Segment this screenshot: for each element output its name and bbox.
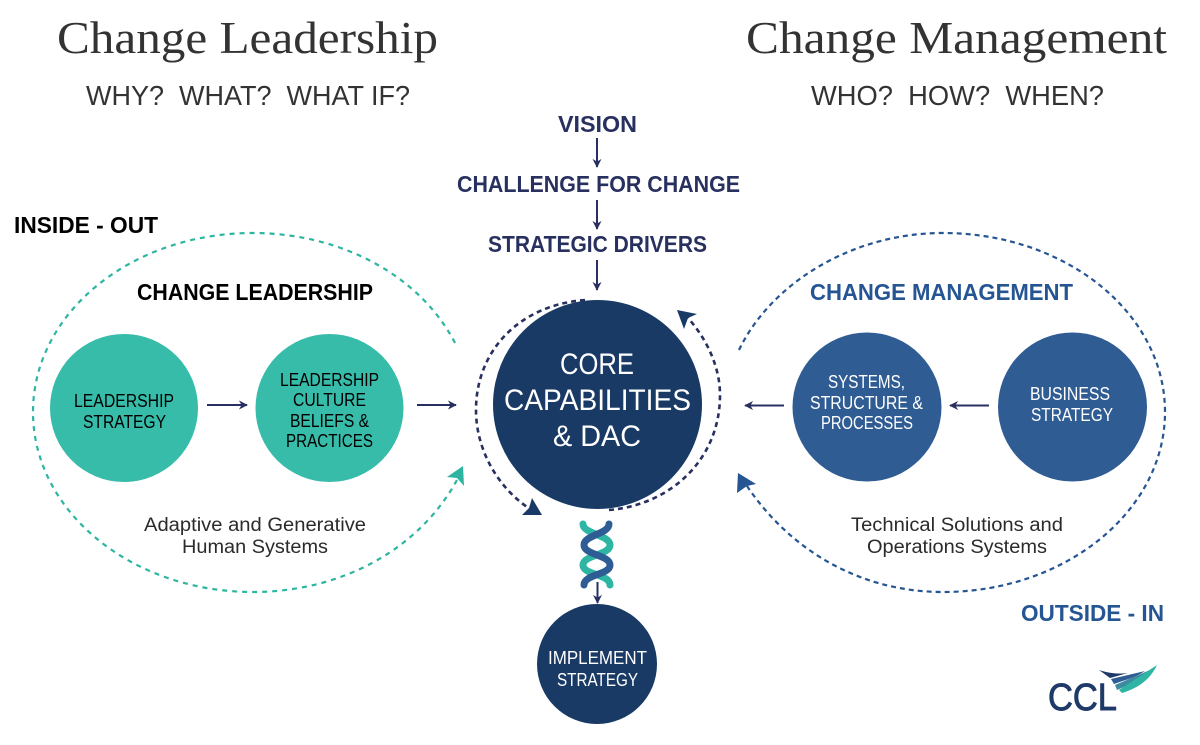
- circle: leadership strategy: [50, 334, 198, 482]
- title: change management: Change Management: [746, 12, 1167, 63]
- subtitle: leadership questions: WHY? WHAT? WHAT IF?: [86, 80, 410, 111]
- label: vision: VISION: [558, 111, 637, 137]
- circle: leadership culture: [256, 334, 404, 482]
- arrow: vision down: [596, 138, 598, 167]
- circle: leadership culture: BELIEFS &: [290, 411, 369, 431]
- text: core capabilities: [504, 348, 691, 453]
- arrow: drivers down: [596, 260, 598, 290]
- label: outside in: OUTSIDE - IN: [1021, 600, 1164, 626]
- arrowhead: teal: [447, 466, 464, 486]
- circle: systems: PROCESSES: [821, 413, 913, 433]
- circle: leadership culture: PRACTICES: [286, 431, 373, 451]
- circle: systems: SYSTEMS,: [828, 372, 905, 392]
- dashed arc: left: [476, 300, 585, 509]
- arrow: business to systems: [950, 404, 989, 406]
- icon: dna helix: [583, 524, 610, 585]
- circle: implement strategy: STRATEGY: [557, 670, 638, 690]
- dashed arc: right: [609, 318, 720, 510]
- text: core capabilities: CAPABILITIES: [504, 384, 691, 417]
- label: challenge for change: CHALLENGE FOR CHANGE: [457, 171, 740, 197]
- label: inside out: INSIDE - OUT: [14, 212, 158, 238]
- circle: leadership strategy: STRATEGY: [83, 412, 166, 432]
- arrow: strategy to culture: [207, 404, 247, 406]
- circle: leadership strategy: LEADERSHIP: [74, 391, 174, 411]
- caption: adaptive systems: [144, 515, 366, 558]
- panel: change management cycle: [737, 233, 1165, 592]
- heading: change leadership: CHANGE LEADERSHIP: [137, 279, 373, 305]
- caption: technical solutions: Operations Systems: [867, 537, 1047, 558]
- arrow: systems to core: [745, 404, 784, 406]
- title: change leadership: Change Leadership: [57, 12, 438, 63]
- circle: business strategy: [998, 332, 1147, 482]
- arrowhead: right arc: [677, 310, 697, 329]
- arrowhead: blue: [737, 473, 756, 493]
- panel: change leadership cycle: [33, 233, 464, 592]
- caption: adaptive systems: Adaptive and Generative: [144, 515, 366, 536]
- logo: ccl: [1048, 665, 1157, 719]
- logo: ccl: CCL: [1048, 677, 1117, 719]
- text: core capabilities: & DAC: [553, 420, 641, 453]
- dashed loop: blue: [739, 233, 1165, 592]
- center flow: vision to core: [457, 111, 740, 290]
- arrow: dna to implement: [596, 582, 598, 603]
- circle: implement strategy: [537, 604, 657, 724]
- caption: technical solutions: Technical Solutions and: [851, 515, 1063, 536]
- label: strategic drivers: STRATEGIC DRIVERS: [488, 231, 707, 257]
- arrow: culture to core: [417, 404, 456, 406]
- caption: technical solutions: [851, 515, 1063, 558]
- circle: systems: [792, 332, 942, 482]
- subtitle: management questions: WHO? HOW? WHEN?: [811, 80, 1104, 111]
- arrow: challenge down: [596, 200, 598, 229]
- icon: wing: [1099, 665, 1157, 693]
- circle: business strategy: STRATEGY: [1031, 405, 1113, 425]
- circle: implement strategy: IMPLEMENT: [548, 648, 647, 668]
- arrowhead: left arc: [522, 498, 542, 515]
- heading: change management: CHANGE MANAGEMENT: [810, 279, 1073, 305]
- circle: leadership culture: LEADERSHIP: [280, 370, 379, 390]
- caption: adaptive systems: Human Systems: [182, 537, 328, 558]
- circle: leadership culture: CULTURE: [293, 390, 366, 410]
- circle: business strategy: BUSINESS: [1030, 384, 1110, 404]
- text: core capabilities: CORE: [560, 348, 634, 381]
- panel: core capabilities: [476, 300, 720, 515]
- dashed loop: teal: [33, 233, 458, 592]
- circle: core: [493, 300, 702, 509]
- circle: systems: STRUCTURE &: [810, 393, 923, 413]
